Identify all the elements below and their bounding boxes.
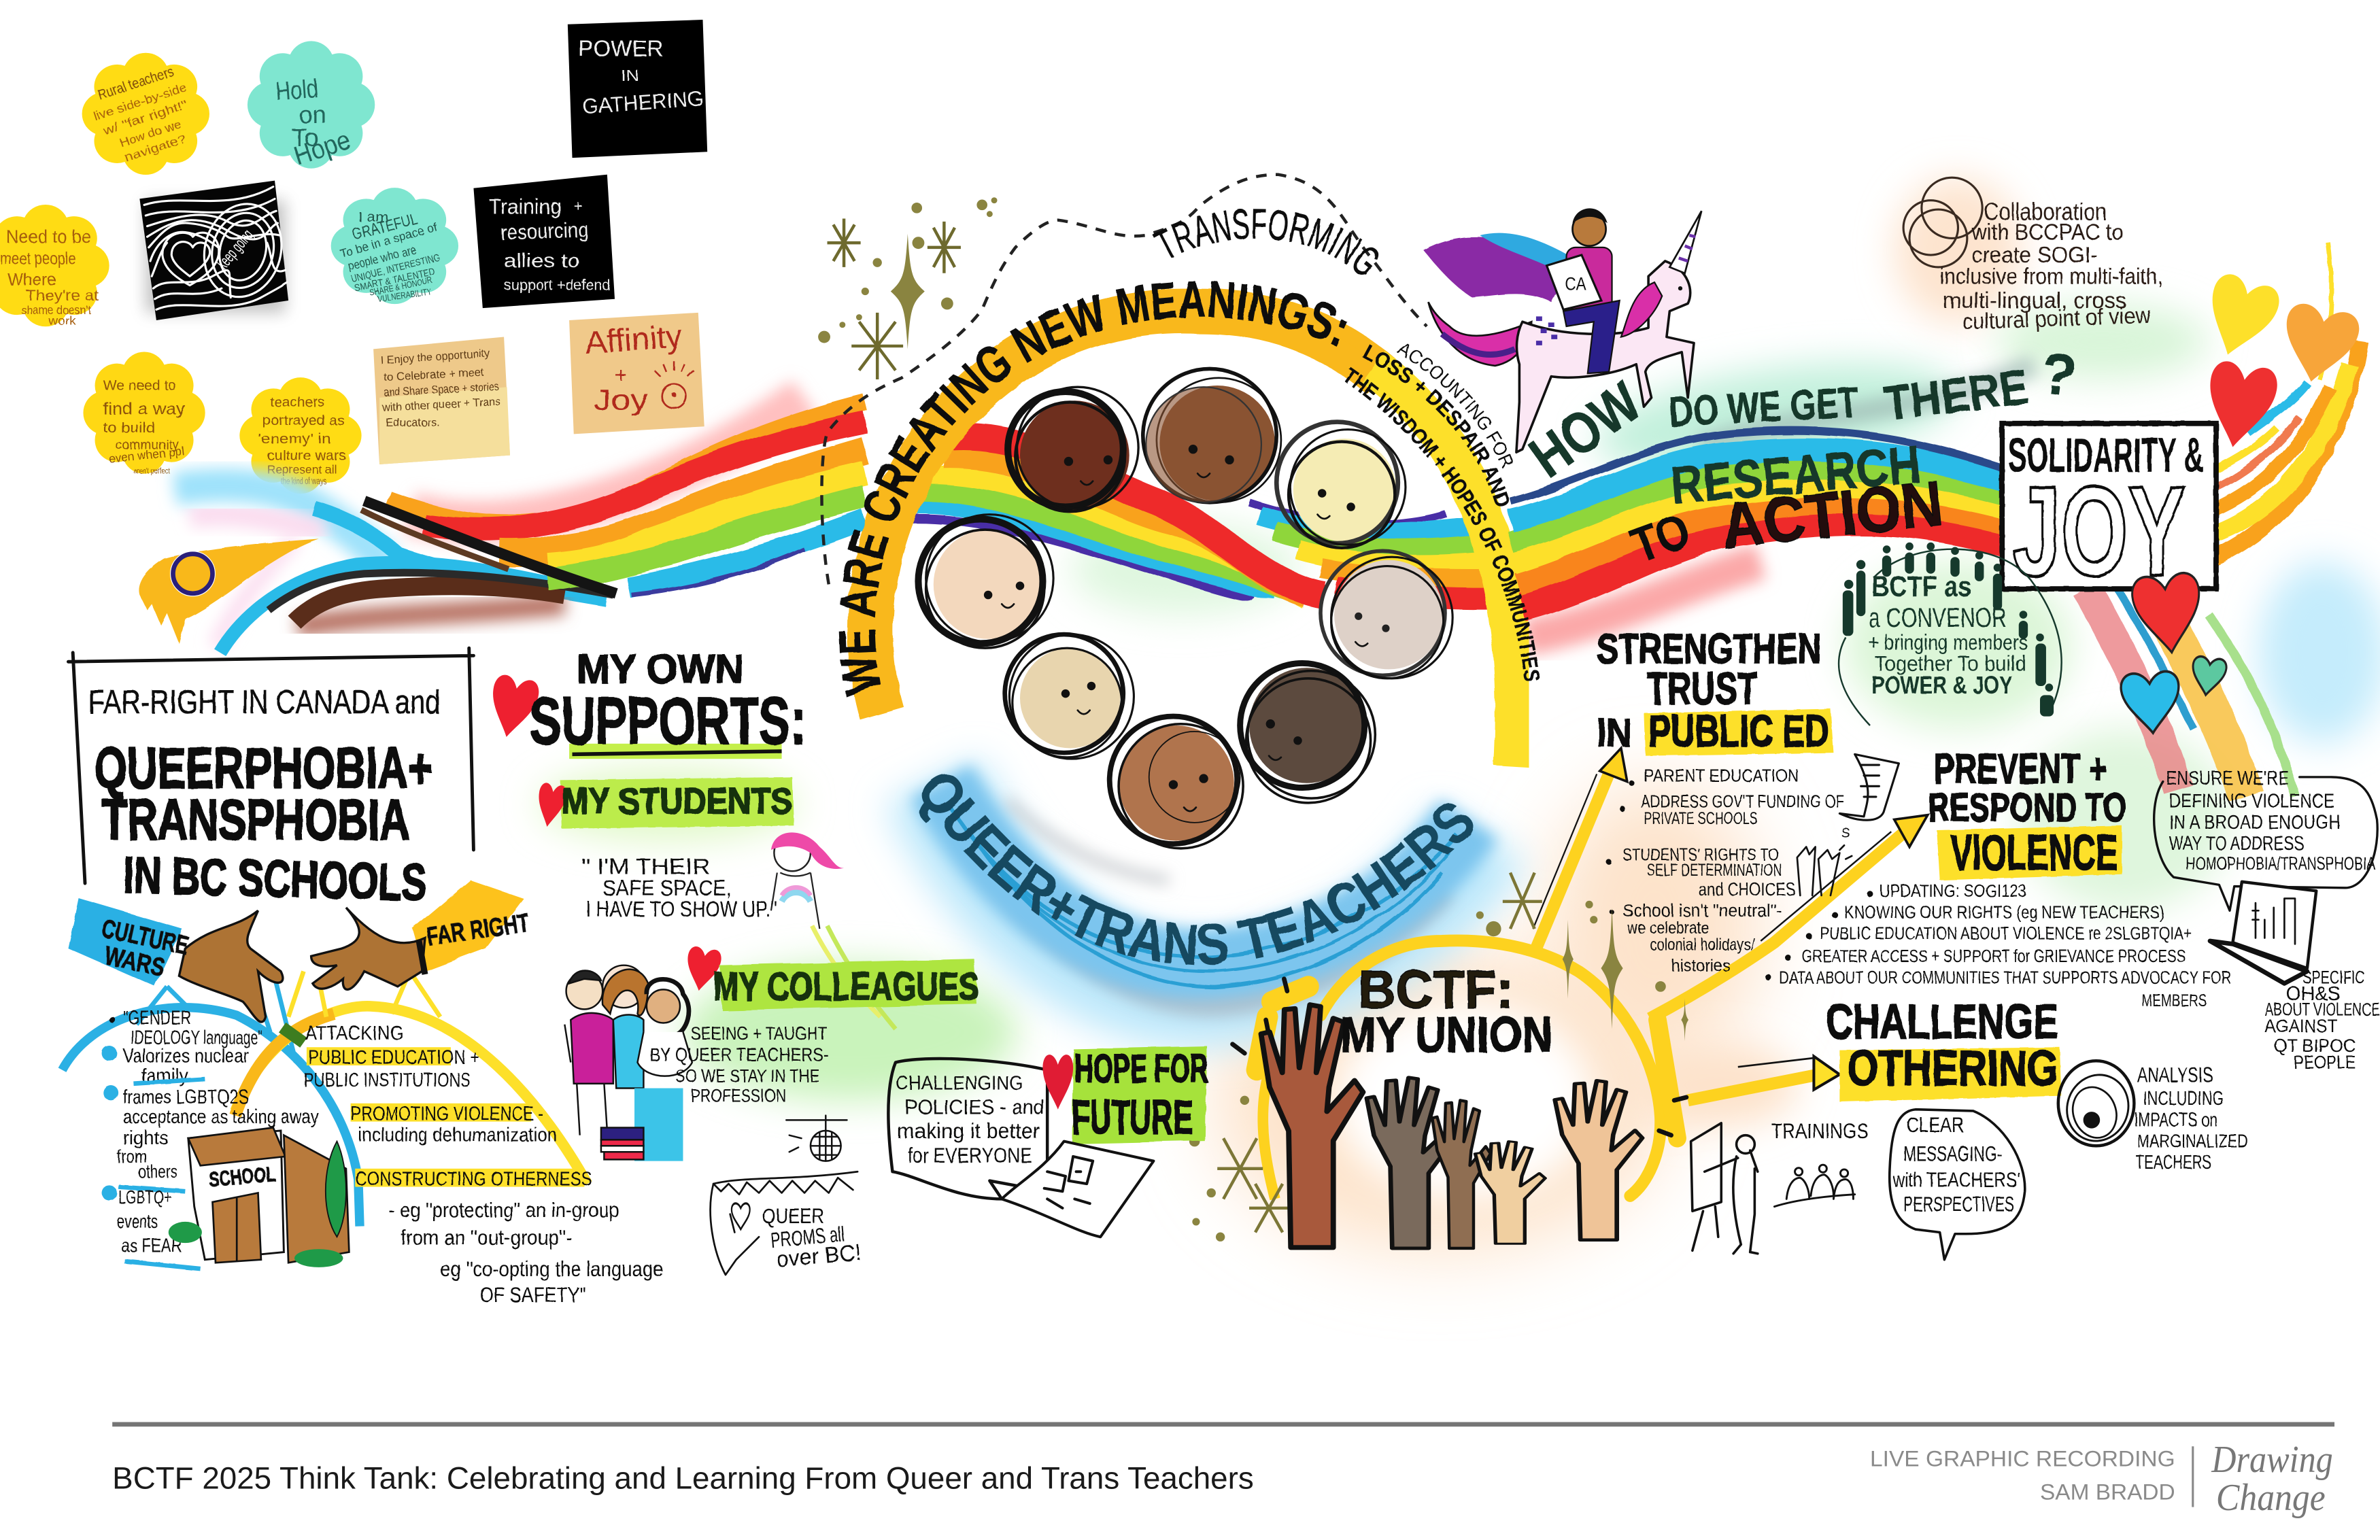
- note: build community: aren't perfect: [133, 466, 170, 475]
- note: hold on to hope: Hope: [290, 124, 354, 171]
- note: hold on to hope: Hold: [275, 75, 319, 106]
- rainbow streak falling below the joy box: [2087, 589, 2295, 797]
- violence action list: MEMBERS: [2142, 992, 2207, 1010]
- my own supports: [484, 645, 806, 759]
- rainbow: right sweep: [1510, 431, 2011, 607]
- sparkles, upper left of the arc: [818, 197, 998, 379]
- dashed line and transforming label: TRANSFORMING: [1152, 209, 1379, 275]
- violence action list: GREATER ACCESS + SUPPORT for GRIEVANCE PROCESS: [1802, 947, 2186, 966]
- prevent and respond to violence: VIOLENCE: [1950, 824, 2118, 880]
- how do we get there heading: ?: [2037, 340, 2081, 409]
- speech bubble: clear messaging: [1890, 1110, 2025, 1260]
- note: rural teachers: w/ "far right!": [101, 98, 189, 138]
- speech bubble: ensure broad definition of violence: IN A BROAD ENOUGH: [2169, 812, 2341, 834]
- note: keep going contour drawing: keep going: [214, 226, 257, 273]
- research to action heading: TO: [1625, 502, 1697, 573]
- note: grateful: SMART & TALENTED: [354, 267, 436, 294]
- trainings with presenter: TRAININGS: [1771, 1119, 1869, 1143]
- note: training and resourcing: Training: [489, 195, 562, 219]
- tail: [1428, 302, 1531, 366]
- public education notes: SELF DETERMINATION: [1647, 861, 1782, 880]
- hand 5: [1555, 1080, 1642, 1240]
- note: grateful: GRATEFUL: [350, 210, 420, 243]
- face 1: [1008, 387, 1138, 511]
- icon: newspaper document: [1002, 1142, 1153, 1237]
- challenging policies bubble: for EVERYONE: [908, 1144, 1032, 1167]
- challenging policies bubble: CHALLENGING: [896, 1073, 1023, 1095]
- note: affinity and joy: [569, 313, 704, 434]
- left list: LGBTQ+: [118, 1186, 171, 1208]
- blue arc: [63, 1008, 360, 1227]
- public education notes: we celebrate: [1627, 919, 1709, 938]
- specific OH and S note: QT BIPOC: [2274, 1036, 2356, 1056]
- public education notes: School isn't "neutral"-: [1622, 902, 1782, 921]
- note: rural teachers: live side-by-side: [92, 80, 188, 123]
- violence action list: UPDATING: SOGI123: [1879, 882, 2026, 901]
- hand 3: [1432, 1100, 1491, 1248]
- left list: [102, 1008, 319, 1269]
- person 3: [638, 979, 692, 1076]
- analysis note: MARGINALIZED: [2137, 1131, 2248, 1152]
- right list: PROMOTING VIOLENCE -: [351, 1103, 543, 1125]
- hope for future: [1042, 1046, 1208, 1144]
- footer credits: Change: [2216, 1477, 2326, 1519]
- circle of eight faces: [918, 369, 1452, 849]
- footer title: BCTF 2025 Think Tank: Celebrating and Learning From Queer and Trans Teachers: [112, 1461, 1254, 1496]
- main heading: TRANSPHOBIA: [102, 787, 410, 851]
- queer proms: QUEER: [762, 1204, 824, 1228]
- violence action list: PUBLIC EDUCATION ABOUT VIOLENCE re 2SLGBTQIA+: [1820, 925, 2192, 944]
- note: hold on to hope: To: [292, 124, 319, 151]
- icon: presenter: [1691, 1123, 1758, 1254]
- note: affinity and joy: Joy: [594, 384, 649, 416]
- rider: [1567, 247, 1612, 309]
- analysis note: INCLUDING: [2143, 1088, 2224, 1110]
- frame heading: FAR-RIGHT IN CANADA and: [88, 684, 440, 721]
- note: build community: find a way: [103, 400, 186, 418]
- arrow: to strengthen trust: [1533, 748, 1627, 948]
- research to action heading: ACTION: [1718, 467, 1946, 562]
- icon: overlapping circles: [1903, 177, 1982, 267]
- icon: document: [1839, 754, 1899, 820]
- how do we get there heading: [1518, 340, 2081, 490]
- public education notes: histories: [1671, 957, 1731, 976]
- lower hearts over the box: [2120, 572, 2228, 735]
- icon: disco ball: [786, 1116, 847, 1161]
- collaboration note: with BCCPAC to: [1971, 220, 2124, 245]
- arrow: to prevent violence: [1650, 815, 1928, 1019]
- note: hold on to hope: on: [299, 101, 326, 129]
- left list: Valorizes nuclear: [123, 1046, 249, 1067]
- frame: [68, 648, 473, 883]
- my students: MY STUDENTS: [562, 781, 792, 821]
- left list: acceptance as taking away: [123, 1106, 319, 1128]
- culture wars hand: CULTURE: [99, 914, 191, 961]
- specific OH and S note: PEOPLE: [2294, 1052, 2356, 1072]
- note: meet people where they're at: work: [48, 314, 76, 328]
- note: grateful: UNIQUE, INTERESTING: [350, 252, 441, 285]
- my colleagues: MY COLLEAGUES: [713, 965, 979, 1009]
- note: enjoy the opportunity: Educators.: [386, 416, 440, 429]
- note: power in gathering: GATHERING: [581, 86, 704, 118]
- footer credits: SAM BRADD: [2040, 1479, 2175, 1504]
- collaboration note: multi-lingual, cross: [1943, 288, 2126, 313]
- pride flag tail on the left: [139, 485, 613, 653]
- my colleagues: SEEING + TAUGHT: [691, 1023, 828, 1044]
- hand 4: [1475, 1142, 1545, 1244]
- challenging policies bubble: [888, 1059, 1047, 1199]
- culture wars hand: [68, 898, 283, 1022]
- note: enjoy the opportunity: [373, 337, 510, 464]
- note: enjoy the opportunity: and Share Space + stories: [384, 380, 499, 399]
- collaboration note: cultural point of view: [1962, 303, 2152, 335]
- note: training and resourcing: support +defend: [504, 276, 610, 293]
- face 8: [918, 515, 1053, 648]
- speech bubble: ensure broad definition of violence: WAY TO ADDRESS: [2169, 833, 2304, 855]
- hand 1: [1261, 1005, 1363, 1248]
- icon: audience: [1774, 1165, 1855, 1207]
- note: training and resourcing: resourcing: [500, 218, 589, 245]
- strengthen trust in public ed: TRUST: [1647, 664, 1758, 715]
- my students: [534, 777, 794, 921]
- note: meet people where they're at: They're at: [26, 287, 99, 304]
- note: grateful: SHARE & HONOUR: [369, 275, 433, 298]
- rainbow: centre ribbon behind faces: [906, 437, 1503, 600]
- research to action heading: RESEARCH: [1669, 434, 1923, 515]
- person 2: [601, 965, 683, 1161]
- speech bubble: clear messaging: CLEAR: [1907, 1113, 1964, 1137]
- my own supports: MY OWN: [577, 645, 744, 691]
- BCTF as a convenor: + bringing members: [1869, 630, 2028, 654]
- school building: SCHOOL: [208, 1162, 276, 1192]
- rainbow fan behind the joy box, right: [2213, 243, 2360, 558]
- my students: I HAVE TO SHOW UP.": [586, 897, 777, 921]
- main heading: IN BC SCHOOLS: [122, 846, 428, 912]
- speech bubble: clear messaging: with TEACHERS': [1892, 1169, 2020, 1192]
- right list: - eg "protecting" an in-group: [388, 1199, 619, 1222]
- soft colour glows: [410, 177, 2380, 1252]
- solidarity and joy box: JOY: [2013, 460, 2186, 602]
- note: power in gathering: [568, 20, 707, 158]
- unicorn and rider: [1424, 208, 1701, 452]
- note: teachers portrayed as enemy: Represent all: [267, 462, 337, 476]
- left list: events: [117, 1211, 158, 1233]
- specific OH and S note: OH&S: [2286, 983, 2341, 1005]
- challenge othering: CHALLENGE: [1826, 995, 2058, 1049]
- prevent and respond to violence: RESPOND TO: [1928, 786, 2126, 830]
- note: training and resourcing: +: [574, 197, 583, 214]
- hope for future: HOPE FOR: [1074, 1047, 1208, 1091]
- person 1: [564, 970, 613, 1135]
- face 5: [1240, 663, 1375, 803]
- sticky notes cluster: [0, 20, 707, 494]
- right list: from an "out-group"-: [401, 1227, 573, 1249]
- public education notes: PARENT EDUCATION: [1644, 767, 1799, 786]
- speech bubble: clear messaging: PERSPECTIVES: [1903, 1192, 2014, 1216]
- culture wars hand: WARS: [102, 942, 167, 982]
- arc sub-lines: accounting for loss and despair: LOSS + DESPAIR AND: [1362, 344, 1510, 507]
- arrow: to challenge othering: [1688, 1057, 1839, 1100]
- note: meet people where they're at: shame doesn't: [21, 303, 91, 317]
- note: build community: to build: [103, 420, 155, 436]
- trainings with presenter: [1691, 1119, 1869, 1254]
- note: grateful: To be in a space of: [339, 220, 439, 260]
- my colleagues: BY QUEER TEACHERS-: [649, 1044, 829, 1065]
- sparkles around union: [1189, 873, 1688, 1242]
- BCTF my union heading: MY UNION: [1340, 1006, 1552, 1063]
- how do we get there heading: DO WE GET: [1667, 379, 1860, 436]
- yellow arrows from the union: [1533, 748, 1928, 1100]
- note: keep going contour drawing: [139, 181, 292, 320]
- analysis note: TEACHERS: [2136, 1152, 2211, 1174]
- union gold halo: [1232, 940, 1686, 1199]
- right list: PUBLIC EDUCATION +: [308, 1047, 479, 1069]
- note: enjoy the opportunity: to Celebrate + meet: [384, 366, 484, 383]
- icon: target circles: [2058, 1061, 2138, 1150]
- strengthen trust in public ed: [1597, 625, 1833, 757]
- note: rural teachers: [82, 53, 209, 175]
- speech bubble: ensure broad definition of violence: [2154, 768, 2377, 910]
- prevent and respond to violence: [1928, 745, 2126, 880]
- public education notes: S: [1841, 826, 1850, 841]
- BCTF as a convenor: POWER & JOY: [1871, 672, 2013, 699]
- yellow arcs: [235, 1006, 588, 1184]
- dashed line and transforming label: [820, 173, 1428, 585]
- note: grateful: people who are: [347, 243, 418, 273]
- right list: eg "co-opting the language: [440, 1257, 663, 1281]
- face 3: [1276, 422, 1406, 548]
- upper right hearts: [2196, 271, 2362, 453]
- speech bubble: ensure broad definition of violence: DEFINING VIOLENCE: [2169, 791, 2334, 812]
- note: teachers portrayed as enemy: teachers: [270, 395, 325, 410]
- left list: rights: [123, 1127, 169, 1149]
- BCTF as a convenor: [1839, 543, 2062, 725]
- note: meet people where they're at: meet people: [0, 250, 76, 268]
- rainbow: left sweep: [388, 403, 865, 595]
- research to action heading: [1625, 434, 1946, 573]
- strengthen trust in public ed: PUBLIC ED: [1648, 706, 1829, 757]
- left list: family: [141, 1065, 188, 1087]
- icon: laptop chart: [2210, 882, 2316, 983]
- public education notes: [1606, 767, 1850, 976]
- note: power in gathering: POWER: [578, 37, 663, 62]
- note: grateful: [331, 188, 458, 304]
- note: hold on to hope: [248, 41, 375, 171]
- prevent and respond to violence: PREVENT +: [1934, 745, 2107, 793]
- school building: [169, 1128, 349, 1267]
- far-right panel: [63, 648, 663, 1307]
- analysis note: ANALYSIS: [2137, 1063, 2213, 1087]
- icon: shrubs: [169, 1222, 202, 1243]
- note: meet people where they're at: Where: [7, 271, 56, 290]
- note: power in gathering: IN: [621, 67, 639, 84]
- public education notes: colonial holidays/: [1650, 936, 1754, 954]
- queer proms: [711, 1116, 862, 1275]
- note: teachers portrayed as enemy: [239, 377, 362, 494]
- left list: frames LGBTQ2S: [123, 1086, 249, 1108]
- note: affinity and joy: +: [615, 364, 627, 388]
- note: teachers portrayed as enemy: 'enemy' in: [258, 432, 331, 447]
- challenging policies bubble: making it better: [897, 1119, 1040, 1143]
- BCTF as a convenor: Together To build: [1875, 652, 2026, 676]
- footer credits: LIVE GRAPHIC RECORDING: [1870, 1446, 2175, 1471]
- BCTF as a convenor: a CONVENOR: [1869, 602, 2007, 633]
- strengthen trust in public ed: IN: [1597, 711, 1632, 755]
- note: rural teachers: navigate?: [123, 132, 188, 165]
- my own supports: SUPPORTS:: [530, 683, 806, 758]
- right list: ATTACKING: [305, 1023, 404, 1044]
- public education notes: and CHOICES: [1699, 879, 1796, 900]
- specific OH and S note: [2264, 967, 2380, 1072]
- icon: tree: [326, 1142, 346, 1237]
- footer rule: [112, 1422, 2334, 1426]
- note: meet people where they're at: [0, 205, 109, 328]
- my students: SAFE SPACE,: [602, 876, 732, 900]
- note: meet people where they're at: Need to be: [6, 226, 91, 247]
- note: teachers portrayed as enemy: culture wars: [267, 448, 346, 463]
- my colleagues: SO WE STAY IN THE: [675, 1066, 819, 1086]
- black diagonal stroke of pride flag: [361, 501, 616, 594]
- footer credits: Drawing: [2211, 1439, 2333, 1481]
- main heading: QUEERPHOBIA+: [94, 736, 432, 800]
- analysis note: [2134, 1063, 2248, 1174]
- how do we get there heading: HOW: [1518, 369, 1652, 490]
- violence action list: KNOWING OUR RIGHTS (eg NEW TEACHERS): [1844, 903, 2164, 922]
- note: build community: [83, 352, 205, 475]
- collaboration note: [1903, 177, 2163, 335]
- right list: including dehumanization: [358, 1125, 557, 1146]
- collaboration note: Collaboration: [1984, 199, 2107, 226]
- violence action list: [1765, 882, 2231, 1010]
- note: teachers portrayed as enemy: portrayed as: [262, 413, 345, 428]
- arc headline: we are creating new meanings: WE ARE CREATING NEW MEANINGS:: [839, 281, 1348, 698]
- left list: "GENDER: [123, 1008, 191, 1029]
- specific OH and S note: AGAINST: [2264, 1016, 2337, 1036]
- left list: IDEOLOGY language": [131, 1027, 262, 1049]
- right list: [303, 1023, 663, 1307]
- note: training and resourcing: [473, 175, 615, 308]
- right list: PUBLIC INSTITUTIONS: [303, 1070, 471, 1091]
- unicorn body: [1516, 261, 1694, 452]
- people ring: [1839, 543, 2062, 725]
- my colleagues: [649, 945, 979, 1106]
- note: teachers portrayed as enemy: the kind of ways: [281, 476, 326, 486]
- hope for future: FUTURE: [1072, 1090, 1193, 1144]
- list highlights: [307, 1047, 584, 1187]
- yellow line from far right arcs: [812, 926, 896, 1029]
- collaboration note: inclusive from multi-faith,: [1940, 264, 2163, 289]
- note: enjoy the opportunity: I Enjoy the opportunity: [380, 347, 490, 367]
- raised hands: [1261, 1005, 1642, 1248]
- violence action list: DATA ABOUT OUR COMMUNITIES THAT SUPPORTS ADVOCACY FOR: [1779, 968, 2231, 987]
- note: grateful: VULNERABILITY: [377, 286, 432, 304]
- note: rural teachers: Rural teachers: [96, 64, 176, 103]
- solidarity and joy box: [2002, 424, 2216, 602]
- challenge othering: OTHERING: [1848, 1040, 2058, 1096]
- unicorn and rider: CA: [1565, 273, 1586, 294]
- far right hand: [311, 880, 531, 989]
- queer proms: over BC!: [775, 1240, 862, 1273]
- bunting and sign: [711, 1171, 857, 1275]
- BCTF my union heading: BCTF:: [1359, 959, 1513, 1019]
- icon: three colleagues: [564, 965, 692, 1161]
- left list: from: [117, 1146, 148, 1167]
- right list: OF SAFETY": [479, 1283, 586, 1307]
- how do we get there heading: THERE: [1882, 360, 2031, 431]
- icon: raised hands: [1797, 845, 1852, 895]
- BCTF my union heading: [1340, 959, 1552, 1063]
- blue smile banner: QUEER+TRANS TEACHERS: [919, 774, 1473, 965]
- strengthen trust in public ed: STRENGTHEN: [1597, 625, 1822, 672]
- note: enjoy the opportunity: with other queer + Trans: [381, 395, 501, 414]
- note: training and resourcing: allies to: [504, 250, 580, 272]
- speech bubble: clear messaging: MESSAGING-: [1903, 1142, 2002, 1166]
- intersex gold flame: [139, 538, 319, 643]
- challenge othering: [1826, 995, 2061, 1102]
- note: affinity and joy: Affinity: [584, 318, 683, 360]
- solidarity and joy box: SOLIDARITY &: [2008, 428, 2204, 483]
- left list: as FEAR: [122, 1235, 182, 1257]
- public education notes: PRIVATE SCHOOLS: [1644, 810, 1758, 828]
- far right hand: FAR RIGHT: [425, 909, 531, 952]
- my students: " I'M THEIR: [581, 855, 711, 879]
- analysis note: IMPACTS on: [2134, 1109, 2217, 1131]
- footer credits: [1870, 1439, 2333, 1519]
- face 2: [1143, 369, 1281, 502]
- face 6: [1110, 717, 1243, 849]
- queer proms: PROMS all: [769, 1222, 845, 1252]
- public education notes: STUDENTS' RIGHTS TO: [1622, 846, 1779, 865]
- collaboration note: create SOGI-: [1972, 243, 2098, 268]
- icon: student with pink hair: [771, 832, 844, 929]
- BCTF as a convenor: BCTF as: [1871, 570, 1972, 602]
- note: build community: We need to: [103, 379, 176, 394]
- big gold and yellow arc: [870, 311, 1515, 766]
- my colleagues: PROFESSION: [691, 1086, 786, 1106]
- face 7: [1005, 634, 1134, 759]
- arc sub-lines: accounting for loss and despair: ACCOUNTING FOR: [1397, 344, 1513, 468]
- hand 2: [1367, 1078, 1454, 1248]
- arc sub-lines: accounting for loss and despair: THE WISDOM + HOPES OF COMMUNITIES: [1345, 367, 1540, 681]
- note: grateful: I am: [358, 210, 388, 225]
- challenging policies bubble: POLICIES - and: [904, 1096, 1044, 1118]
- left list: others: [138, 1161, 177, 1182]
- speech bubble: ensure broad definition of violence: ENSURE WE'RE: [2166, 768, 2289, 789]
- note: build community: community: [116, 439, 180, 453]
- cape: [1424, 237, 1572, 302]
- public education notes: ADDRESS GOV'T FUNDING OF: [1641, 793, 1844, 812]
- right list: CONSTRUCTING OTHERNESS: [355, 1168, 592, 1190]
- note: build community: even when ppl: [108, 444, 185, 466]
- main heading: [94, 736, 432, 912]
- face 4: [1321, 551, 1452, 679]
- note: rural teachers: How do we: [118, 117, 183, 150]
